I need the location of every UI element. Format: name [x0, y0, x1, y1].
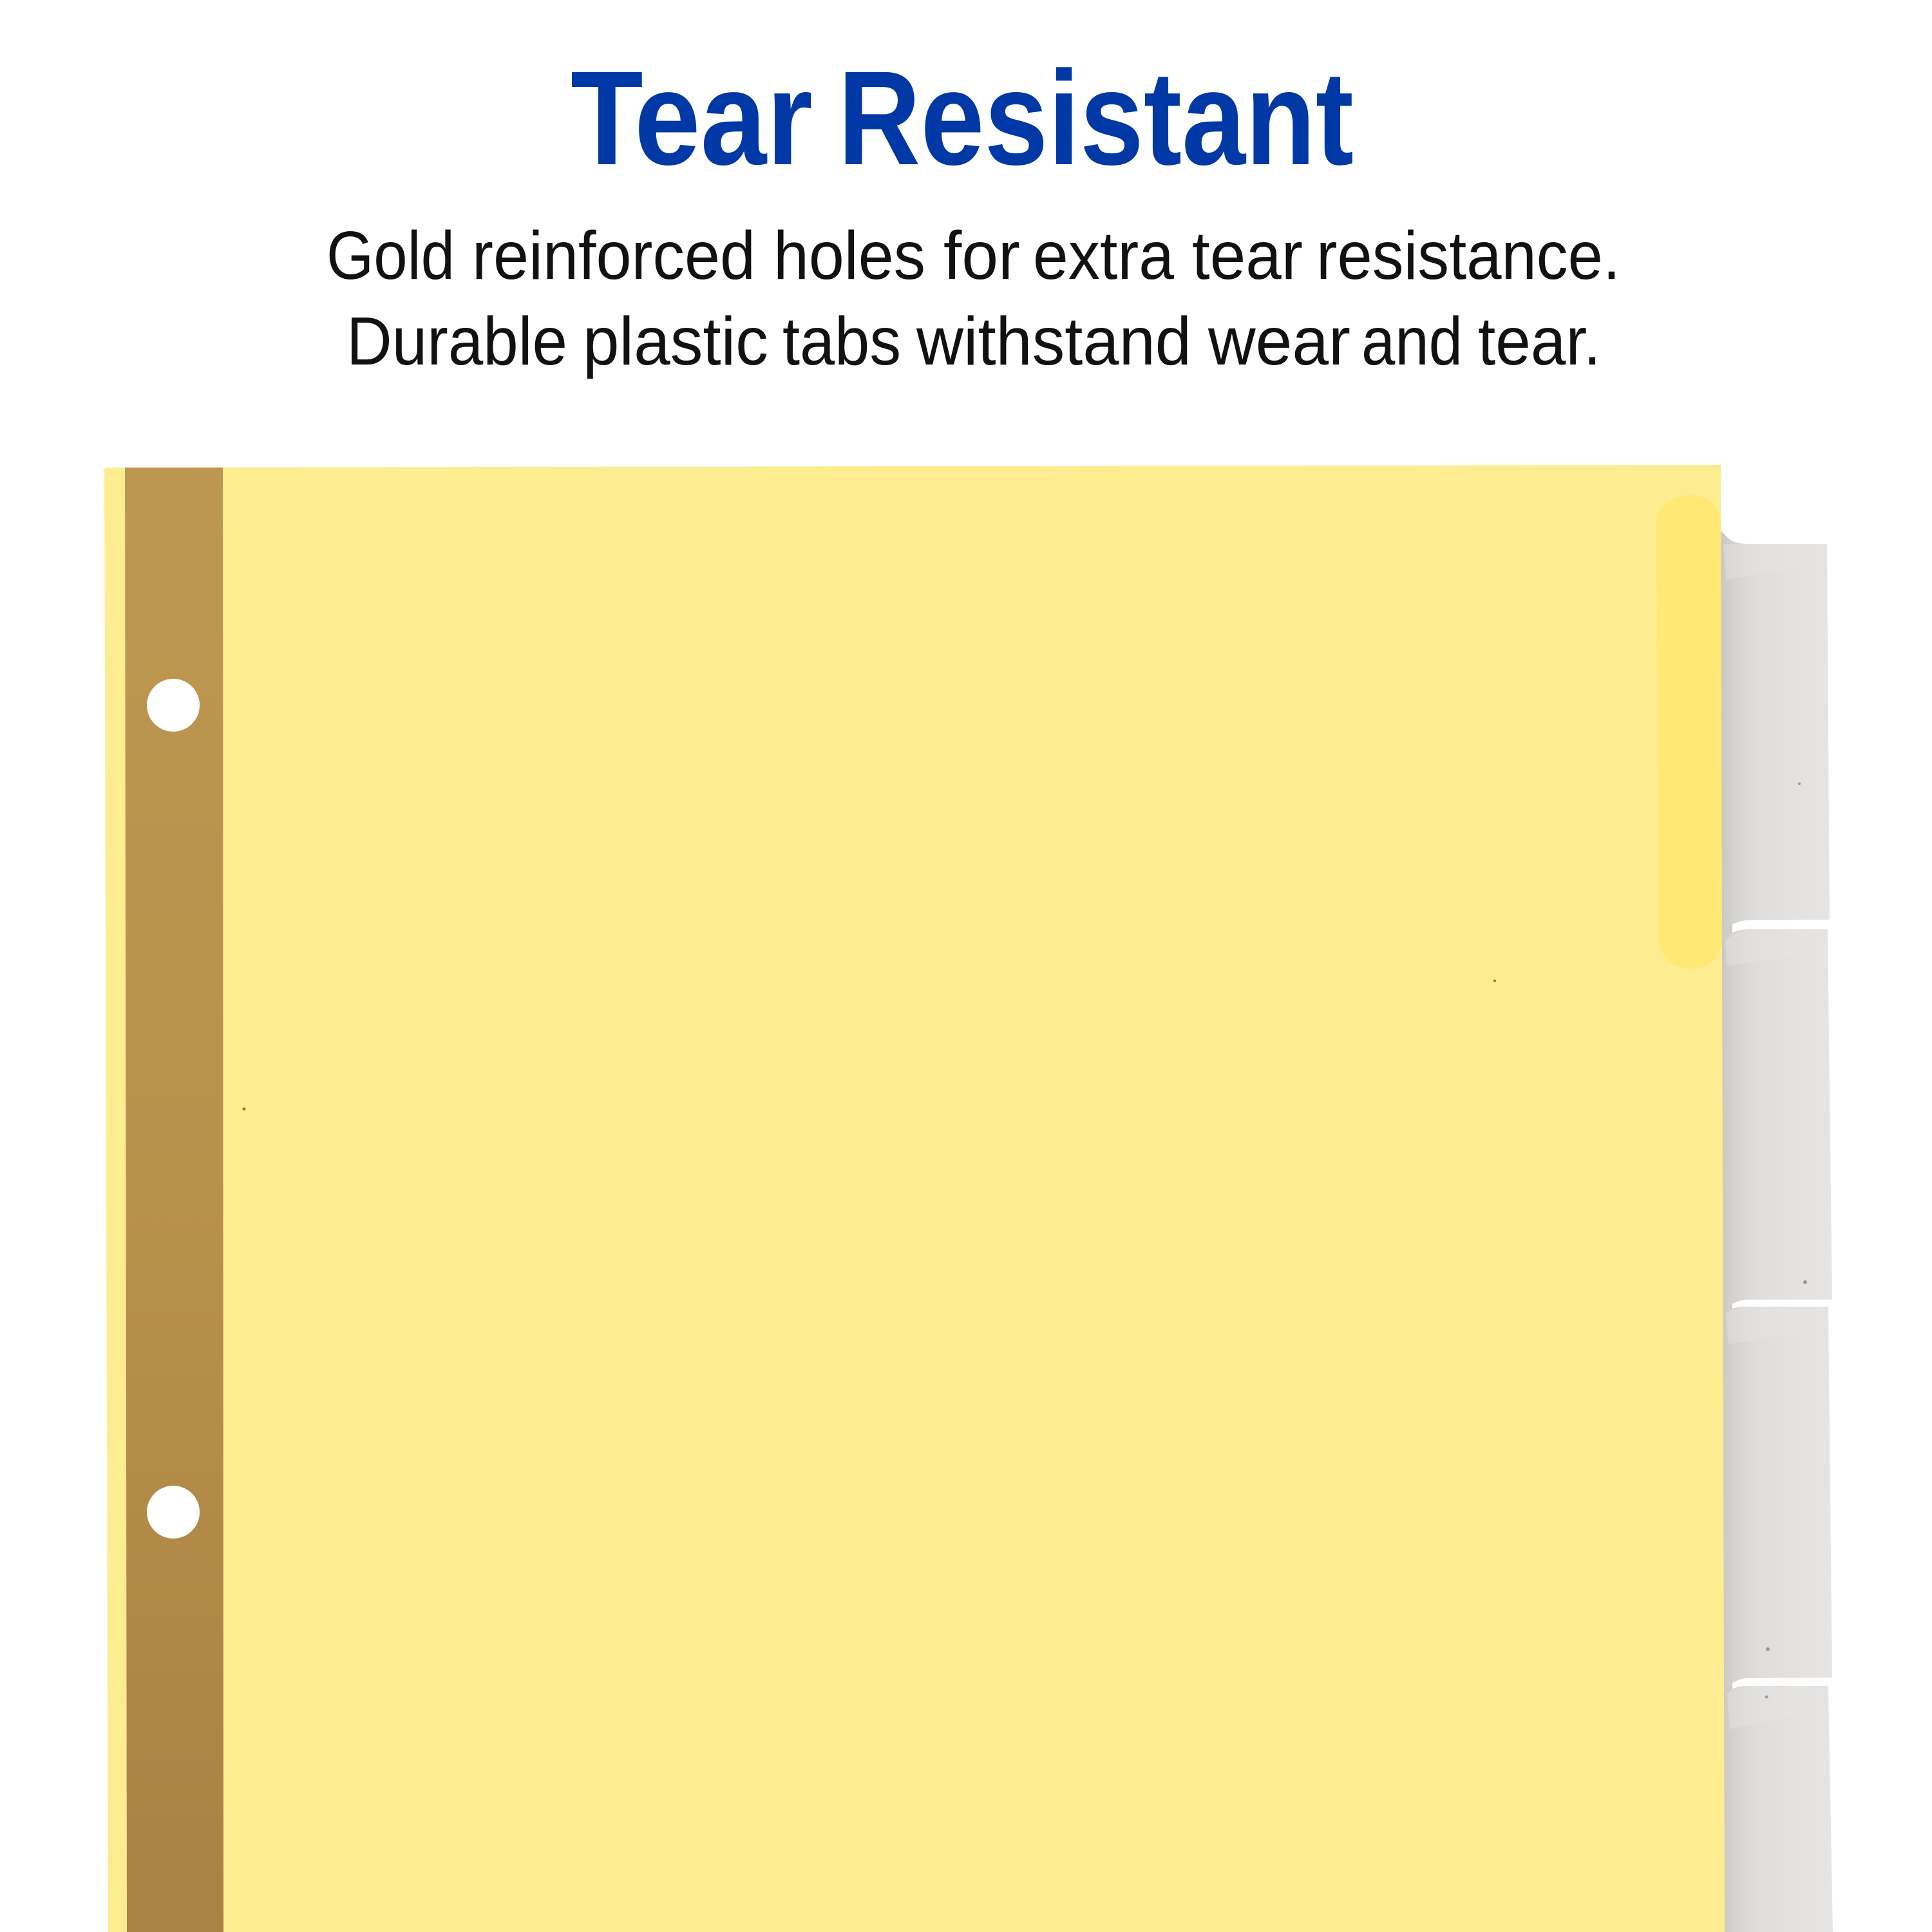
plastic tabs [1719, 529, 1833, 1932]
yellow tab strip overlap [1656, 495, 1722, 969]
gold reinforcement strip [125, 468, 223, 1932]
title [571, 44, 1354, 193]
tab 2 [1721, 929, 1832, 1311]
tab 4 [1723, 1686, 1833, 1932]
title: Resistant [838, 44, 1354, 193]
subtitle line 2: plastic [583, 303, 768, 379]
subtitle line 2: and [1361, 303, 1463, 379]
subtitle line 2: withstand [916, 303, 1191, 379]
subtitle line 2: tear. [1478, 303, 1601, 379]
subtitle line 1: reinforced [472, 218, 755, 294]
punched hole bottom [147, 1486, 200, 1539]
subtitle line 1: extra [1033, 218, 1174, 294]
subtitle line 1: for [943, 218, 1020, 294]
tab specks [1765, 782, 1807, 1699]
tab backing near page edge [1719, 529, 1732, 1932]
subtitle line 2: tabs [782, 303, 901, 379]
tab 1 [1719, 529, 1830, 931]
subtitle line 1: Gold [327, 218, 455, 294]
subtitle line 2 [346, 303, 1601, 379]
yellow divider page [104, 465, 1725, 1932]
subtitle line 2: wear [1208, 303, 1350, 379]
subtitle line 1 [327, 218, 1620, 294]
tab 3 [1722, 1307, 1832, 1690]
subtitle line 2: Durable [346, 303, 567, 379]
subtitle line 1: tear [1192, 218, 1303, 294]
title: Tear [571, 44, 813, 193]
page specks [242, 980, 1496, 1110]
subtitle line 1: holes [773, 218, 925, 294]
subtitle line 1: resistance. [1316, 218, 1620, 294]
punched hole top [147, 679, 200, 732]
